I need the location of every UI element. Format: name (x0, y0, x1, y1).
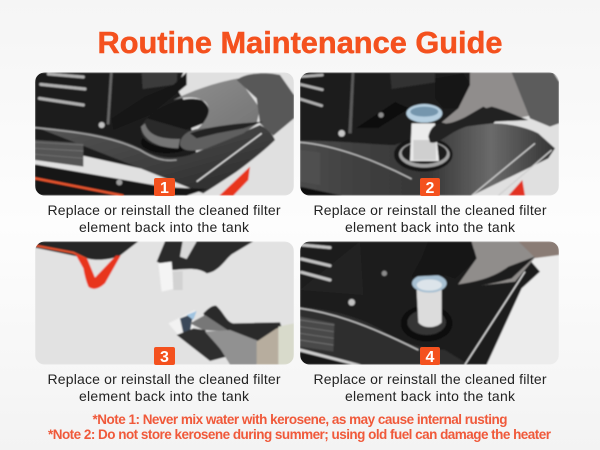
title: Routine Maintenance Guide (98, 25, 502, 60)
caption 4: element back into the tank (345, 388, 516, 404)
step number badge 3 (154, 347, 175, 366)
step number badge 1 (154, 178, 175, 197)
step number badge 4 (420, 347, 440, 366)
step number badge 3: 3 (160, 349, 169, 366)
photo: reinstalling the filter (300, 241, 559, 365)
step number badge 2: 2 (426, 180, 435, 197)
caption 2: Replace or reinstall the cleaned filter (314, 202, 547, 218)
note 1: *Note 1: Never mix water with kerosene, as may cause internal rusting (92, 412, 508, 427)
caption 4 (314, 371, 547, 404)
step number badge 4: 4 (426, 349, 435, 366)
caption 1: Replace or reinstall the cleaned filter (48, 202, 281, 218)
caption 1 (48, 202, 281, 235)
caption 3 (48, 371, 281, 404)
caption 3: element back into the tank (79, 388, 250, 404)
caption 4: Replace or reinstall the cleaned filter (314, 371, 547, 387)
step number badge 1: 1 (160, 180, 169, 197)
panel: step 3 (35, 241, 294, 404)
panel: step 4 (300, 241, 559, 404)
step number badge 2 (420, 178, 440, 197)
caption 1: element back into the tank (79, 219, 250, 235)
caption 3: Replace or reinstall the cleaned filter (48, 371, 281, 387)
photo: hand turning the tank cap (35, 72, 294, 196)
caption 2: element back into the tank (345, 219, 516, 235)
photo: cleaning the filter (35, 241, 294, 365)
caption 2 (314, 202, 547, 235)
panel: step 2 (300, 72, 559, 235)
panel: step 1 (35, 72, 294, 235)
note 2: *Note 2: Do not store kerosene during summer; using old fuel can damage the heater (48, 427, 552, 442)
photo: pulling out the filter (300, 72, 559, 196)
